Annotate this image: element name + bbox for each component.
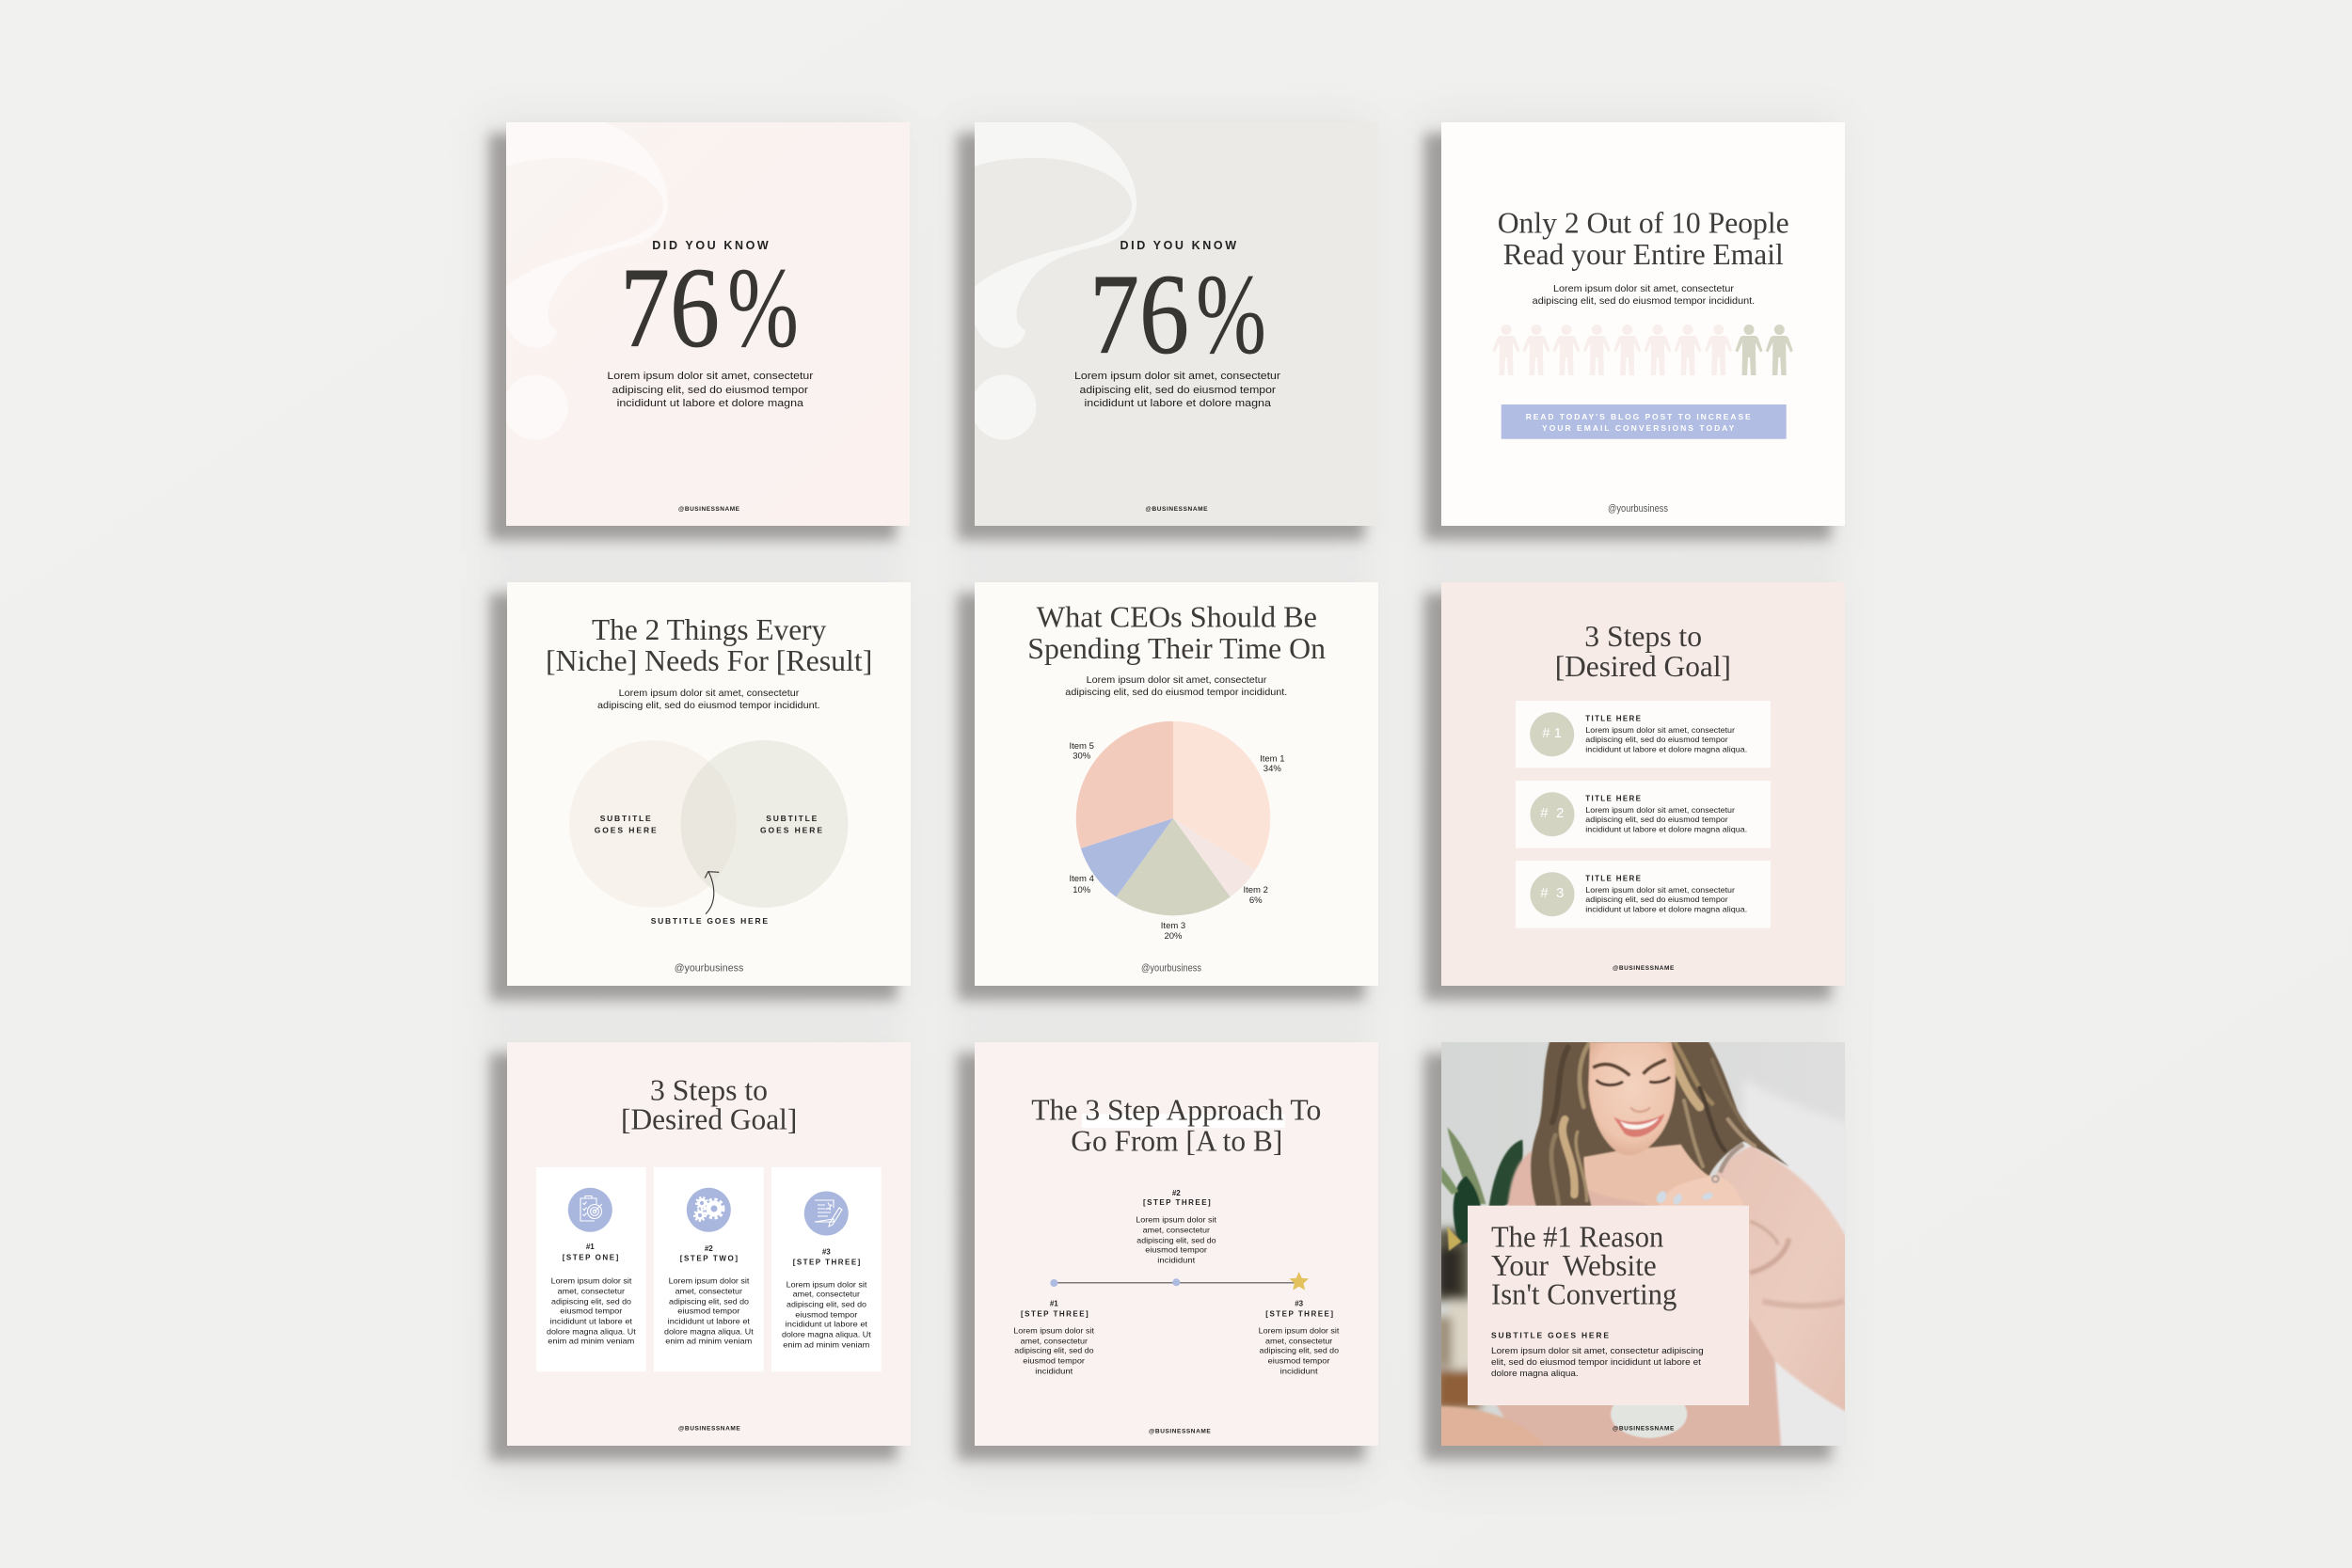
chart labels: 10% xyxy=(1073,885,1091,895)
title xyxy=(1498,206,1789,271)
icon: gears xyxy=(687,1188,731,1232)
title: Isn't Converting xyxy=(1491,1277,1677,1311)
text block: description xyxy=(597,688,820,711)
decorative highlight behind title xyxy=(1082,1114,1285,1128)
title: Spending Their Time On xyxy=(1027,631,1326,665)
card: step 3: adipiscing elit, sed do eiusmod tempor xyxy=(1585,895,1728,904)
step 3 text: incididunt xyxy=(1280,1366,1318,1375)
card: step 3: Lorem ipsum dolor sit amet, consectetur xyxy=(1585,885,1735,895)
card: step 1: incididunt ut labore et dolore magna aliqua. xyxy=(1585,745,1747,754)
timeline with dots and star xyxy=(1050,1272,1309,1291)
panel: did you know pink xyxy=(502,122,910,526)
card: step one: dolore magna aliqua. Ut xyxy=(547,1326,636,1336)
text block: description: dolore magna aliqua. xyxy=(1491,1369,1579,1379)
label: overlap subtitle: SUBTITLE GOES HERE xyxy=(651,916,768,926)
step 2 text: Lorem ipsum dolor sit xyxy=(1136,1214,1217,1224)
card: step one xyxy=(536,1167,646,1371)
card: step three: [STEP THREE] xyxy=(793,1258,861,1266)
handle: @yourbusiness xyxy=(1608,503,1668,515)
card: step 2: TITLE HERE xyxy=(1585,795,1642,803)
panel: three steps rows xyxy=(1441,582,1845,986)
title xyxy=(1491,1219,1677,1311)
plant leaves xyxy=(1441,1127,1523,1251)
handle: @BUSINESSNAME xyxy=(1146,506,1208,513)
card: step one: #1 xyxy=(586,1243,595,1251)
card: step two: adipiscing elit, sed do xyxy=(669,1296,749,1306)
card: step 1: Lorem ipsum dolor sit amet, consectetur xyxy=(1585,725,1735,735)
title xyxy=(1031,1093,1321,1157)
title: The 2 Things Every xyxy=(592,612,826,646)
card: step one: eiusmod tempor xyxy=(560,1306,622,1315)
handle: @BUSINESSNAME xyxy=(1613,965,1675,972)
step 3 text: #3 xyxy=(1295,1299,1304,1307)
title xyxy=(621,1072,797,1136)
callout: blue button: READ TODAY'S BLOG POST TO INCREASE xyxy=(1526,412,1751,421)
chart labels: Item 1 xyxy=(1260,753,1285,764)
card: step 3: incididunt ut labore et dolore magna aliqua. xyxy=(1585,905,1747,914)
callout: blue button xyxy=(1502,404,1787,439)
card: step three: #3 xyxy=(822,1247,831,1256)
step 3 text: Lorem ipsum dolor sit xyxy=(1259,1325,1340,1335)
title: The 3 Step Approach To xyxy=(1031,1093,1321,1127)
icon: clipboard with target xyxy=(568,1188,612,1232)
title: Go From [A to B] xyxy=(1071,1123,1282,1157)
card: step two xyxy=(654,1167,764,1371)
panel: photo with text card xyxy=(1437,1037,1851,1451)
stat: 76 percent: 76 xyxy=(620,245,720,372)
title: The #1 Reason xyxy=(1491,1219,1663,1253)
title xyxy=(1555,619,1731,683)
panel: three steps columns xyxy=(507,1042,911,1446)
text block: description: Lorem ipsum dolor sit amet, consectetur xyxy=(607,371,814,382)
text block: description: adipiscing elit, sed do eiusmod tempor xyxy=(612,385,808,396)
stat: 76 percent xyxy=(1089,251,1266,378)
chart labels: Item 5 xyxy=(1069,741,1094,752)
card: step one: incididunt ut labore et xyxy=(550,1316,633,1325)
chart labels: Item 3 xyxy=(1161,921,1185,931)
card: step three: amet, consectetur xyxy=(793,1290,860,1299)
chart labels: Item 2 xyxy=(1243,885,1268,895)
chart: venn circles: GOES HERE xyxy=(595,825,657,834)
card: step one: adipiscing elit, sed do xyxy=(551,1296,631,1306)
step 3 text xyxy=(1259,1299,1340,1375)
icon: question mark watermark xyxy=(971,122,1136,440)
text block: description xyxy=(1533,283,1755,307)
facial features and details xyxy=(1593,1060,1719,1438)
card: step 3: #3 xyxy=(1540,885,1564,901)
card: step 2: incididunt ut labore et dolore magna aliqua. xyxy=(1585,825,1747,834)
text block: description: incididunt ut labore et dolore magna xyxy=(1084,398,1272,409)
text block: description: Lorem ipsum dolor sit amet, consectetur xyxy=(1553,283,1735,294)
card: step one: [STEP ONE] xyxy=(563,1253,619,1261)
card: step 1: #1 xyxy=(1542,725,1562,741)
pictogram: ten people, two highlighted xyxy=(1492,325,1793,375)
card: step three: eiusmod tempor xyxy=(795,1309,857,1319)
panel: venn diagram xyxy=(507,582,911,986)
title: Read your Entire Email xyxy=(1503,237,1784,271)
handle: @yourbusiness xyxy=(675,963,744,974)
step 3 text: [STEP THREE] xyxy=(1265,1309,1333,1318)
card: step 1: TITLE HERE xyxy=(1585,715,1642,723)
panel: three step timeline xyxy=(975,1042,1378,1446)
chart: pie xyxy=(1076,721,1270,915)
chart labels xyxy=(1069,741,1285,942)
card: step one: amet, consectetur xyxy=(558,1286,625,1295)
step 2 text: [STEP THREE] xyxy=(1143,1198,1211,1207)
title: 3 Steps to xyxy=(1584,619,1702,653)
title xyxy=(546,612,872,677)
panel: only 2 out of 10 xyxy=(1441,122,1845,526)
text block: description xyxy=(607,371,814,409)
title xyxy=(1027,600,1326,665)
step 1 text: eiusmod tempor xyxy=(1023,1355,1085,1365)
step 1 text: incididunt xyxy=(1035,1366,1073,1375)
panel: did you know sage xyxy=(971,122,1378,526)
card: step one: Lorem ipsum dolor sit xyxy=(551,1275,632,1285)
card: step three: enim ad minim veniam xyxy=(783,1339,869,1349)
callout: blue button: YOUR EMAIL CONVERSIONS TODAY xyxy=(1542,423,1735,433)
step 1 text: adipiscing elit, sed do xyxy=(1014,1345,1094,1354)
body xyxy=(1437,1132,1851,1451)
text block: description: Lorem ipsum dolor sit amet, consectetur xyxy=(1074,371,1280,382)
handle: @yourbusiness xyxy=(1141,963,1201,974)
chart: venn circles: SUBTITLE xyxy=(600,814,651,823)
step 2 text: incididunt xyxy=(1157,1255,1196,1264)
card: step 3: TITLE HERE xyxy=(1585,875,1642,883)
step 2 text: adipiscing elit, sed do xyxy=(1136,1235,1216,1244)
card: step 1: adipiscing elit, sed do eiusmod tempor xyxy=(1585,735,1728,744)
card: step two: incididunt ut labore et xyxy=(668,1316,751,1325)
text block: description: adipiscing elit, sed do eiusmod tempor incididunt. xyxy=(1065,687,1287,698)
title: 3 Steps to xyxy=(650,1072,768,1106)
card: step 1 xyxy=(1516,701,1771,768)
card: step three: incididunt ut labore et xyxy=(786,1320,868,1329)
card: step two: Lorem ipsum dolor sit xyxy=(669,1275,750,1285)
step 3 text: adipiscing elit, sed do xyxy=(1260,1345,1339,1354)
card: step three: Lorem ipsum dolor sit xyxy=(787,1279,867,1289)
chart: venn circles: GOES HERE xyxy=(760,825,822,834)
title: [Niche] Needs For [Result] xyxy=(546,643,872,677)
chart labels: 30% xyxy=(1073,752,1091,762)
heading: did you know: DID YOU KNOW xyxy=(1120,239,1236,252)
illustration: smiling woman in pink sweater xyxy=(1437,1037,1851,1451)
card: step three: adipiscing elit, sed do xyxy=(787,1300,866,1309)
stat: 76 percent: % xyxy=(727,245,799,372)
card: step 2: Lorem ipsum dolor sit amet, consectetur xyxy=(1585,805,1735,815)
stat: 76 percent xyxy=(620,245,799,372)
card: step three: dolore magna aliqua. Ut xyxy=(782,1330,871,1339)
handle: @BUSINESSNAME xyxy=(1149,1428,1211,1434)
card: step two: #2 xyxy=(705,1244,713,1253)
text block: description: adipiscing elit, sed do eiusmod tempor incididunt. xyxy=(597,700,820,711)
card: step two: enim ad minim veniam xyxy=(665,1336,752,1345)
text block: description: Lorem ipsum dolor sit amet, consectetur xyxy=(619,688,800,699)
card: step two: eiusmod tempor xyxy=(677,1306,739,1315)
card: step two: [STEP TWO] xyxy=(680,1254,738,1262)
title: [Desired Goal] xyxy=(621,1102,797,1136)
chart labels: 20% xyxy=(1164,931,1183,942)
text block: description: adipiscing elit, sed do eiusmod tempor incididunt. xyxy=(1533,295,1755,307)
chart labels: 34% xyxy=(1263,764,1281,774)
step 3 text: amet, consectetur xyxy=(1265,1336,1332,1345)
step 2 text xyxy=(1136,1189,1217,1264)
card: step two: dolore magna aliqua. Ut xyxy=(664,1326,754,1336)
chart labels: 6% xyxy=(1249,895,1263,906)
text block: description xyxy=(1491,1346,1704,1379)
subtitle: SUBTITLE GOES HERE xyxy=(1491,1331,1609,1340)
step 2 text: amet, consectetur xyxy=(1143,1225,1210,1234)
handle: @BUSINESSNAME xyxy=(678,506,740,513)
step 1 text xyxy=(1013,1299,1095,1375)
chart: venn circles: SUBTITLE xyxy=(766,814,818,823)
card: text overlay xyxy=(1468,1206,1749,1405)
background blur: bed, shelf, candle xyxy=(1437,1079,1851,1451)
text block: description xyxy=(1065,674,1287,698)
text block: description: incididunt ut labore et dolore magna xyxy=(617,398,804,409)
step 2 text: eiusmod tempor xyxy=(1145,1244,1207,1254)
card: step 2 xyxy=(1516,781,1771,848)
card: step 3 xyxy=(1516,861,1771,928)
card: step 2: #2 xyxy=(1540,805,1564,821)
text block: description: elit, sed do eiusmod tempor incididunt ut labore et xyxy=(1491,1357,1701,1368)
card: step 2: adipiscing elit, sed do eiusmod tempor xyxy=(1585,815,1728,824)
card: step one: enim ad minim veniam xyxy=(548,1336,634,1345)
text block: description: Lorem ipsum dolor sit amet, consectetur adipiscing xyxy=(1491,1346,1704,1356)
text block: description: adipiscing elit, sed do eiusmod tempor xyxy=(1080,385,1276,396)
text block: description: Lorem ipsum dolor sit amet, consectetur xyxy=(1087,674,1267,686)
stat: 76 percent: 76 xyxy=(1089,251,1189,378)
arrow xyxy=(705,872,719,914)
chart labels: Item 4 xyxy=(1069,874,1094,884)
handle: @BUSINESSNAME xyxy=(1613,1425,1675,1432)
panel: pie chart xyxy=(975,582,1378,986)
title: What CEOs Should Be xyxy=(1037,600,1317,634)
card: step two: amet, consectetur xyxy=(675,1286,742,1295)
step 1 text: amet, consectetur xyxy=(1021,1336,1088,1345)
step 2 text: #2 xyxy=(1172,1189,1181,1197)
icon: question mark watermark xyxy=(502,122,668,440)
icon: document with pencil xyxy=(804,1191,849,1236)
step 1 text: [STEP THREE] xyxy=(1021,1309,1089,1318)
text block: description xyxy=(1074,371,1280,409)
title: Your Website xyxy=(1491,1248,1657,1282)
step 3 text: eiusmod tempor xyxy=(1268,1355,1330,1365)
chart: venn circles xyxy=(569,740,849,908)
hair xyxy=(1531,1037,1789,1213)
step 1 text: #1 xyxy=(1050,1299,1058,1307)
step 1 text: Lorem ipsum dolor sit xyxy=(1013,1325,1095,1335)
title: Only 2 Out of 10 People xyxy=(1498,206,1789,240)
handle: @BUSINESSNAME xyxy=(678,1425,740,1432)
stat: 76 percent: % xyxy=(1196,251,1266,378)
heading: did you know: DID YOU KNOW xyxy=(652,239,769,252)
title: [Desired Goal] xyxy=(1555,649,1731,683)
card: step three xyxy=(771,1167,882,1371)
